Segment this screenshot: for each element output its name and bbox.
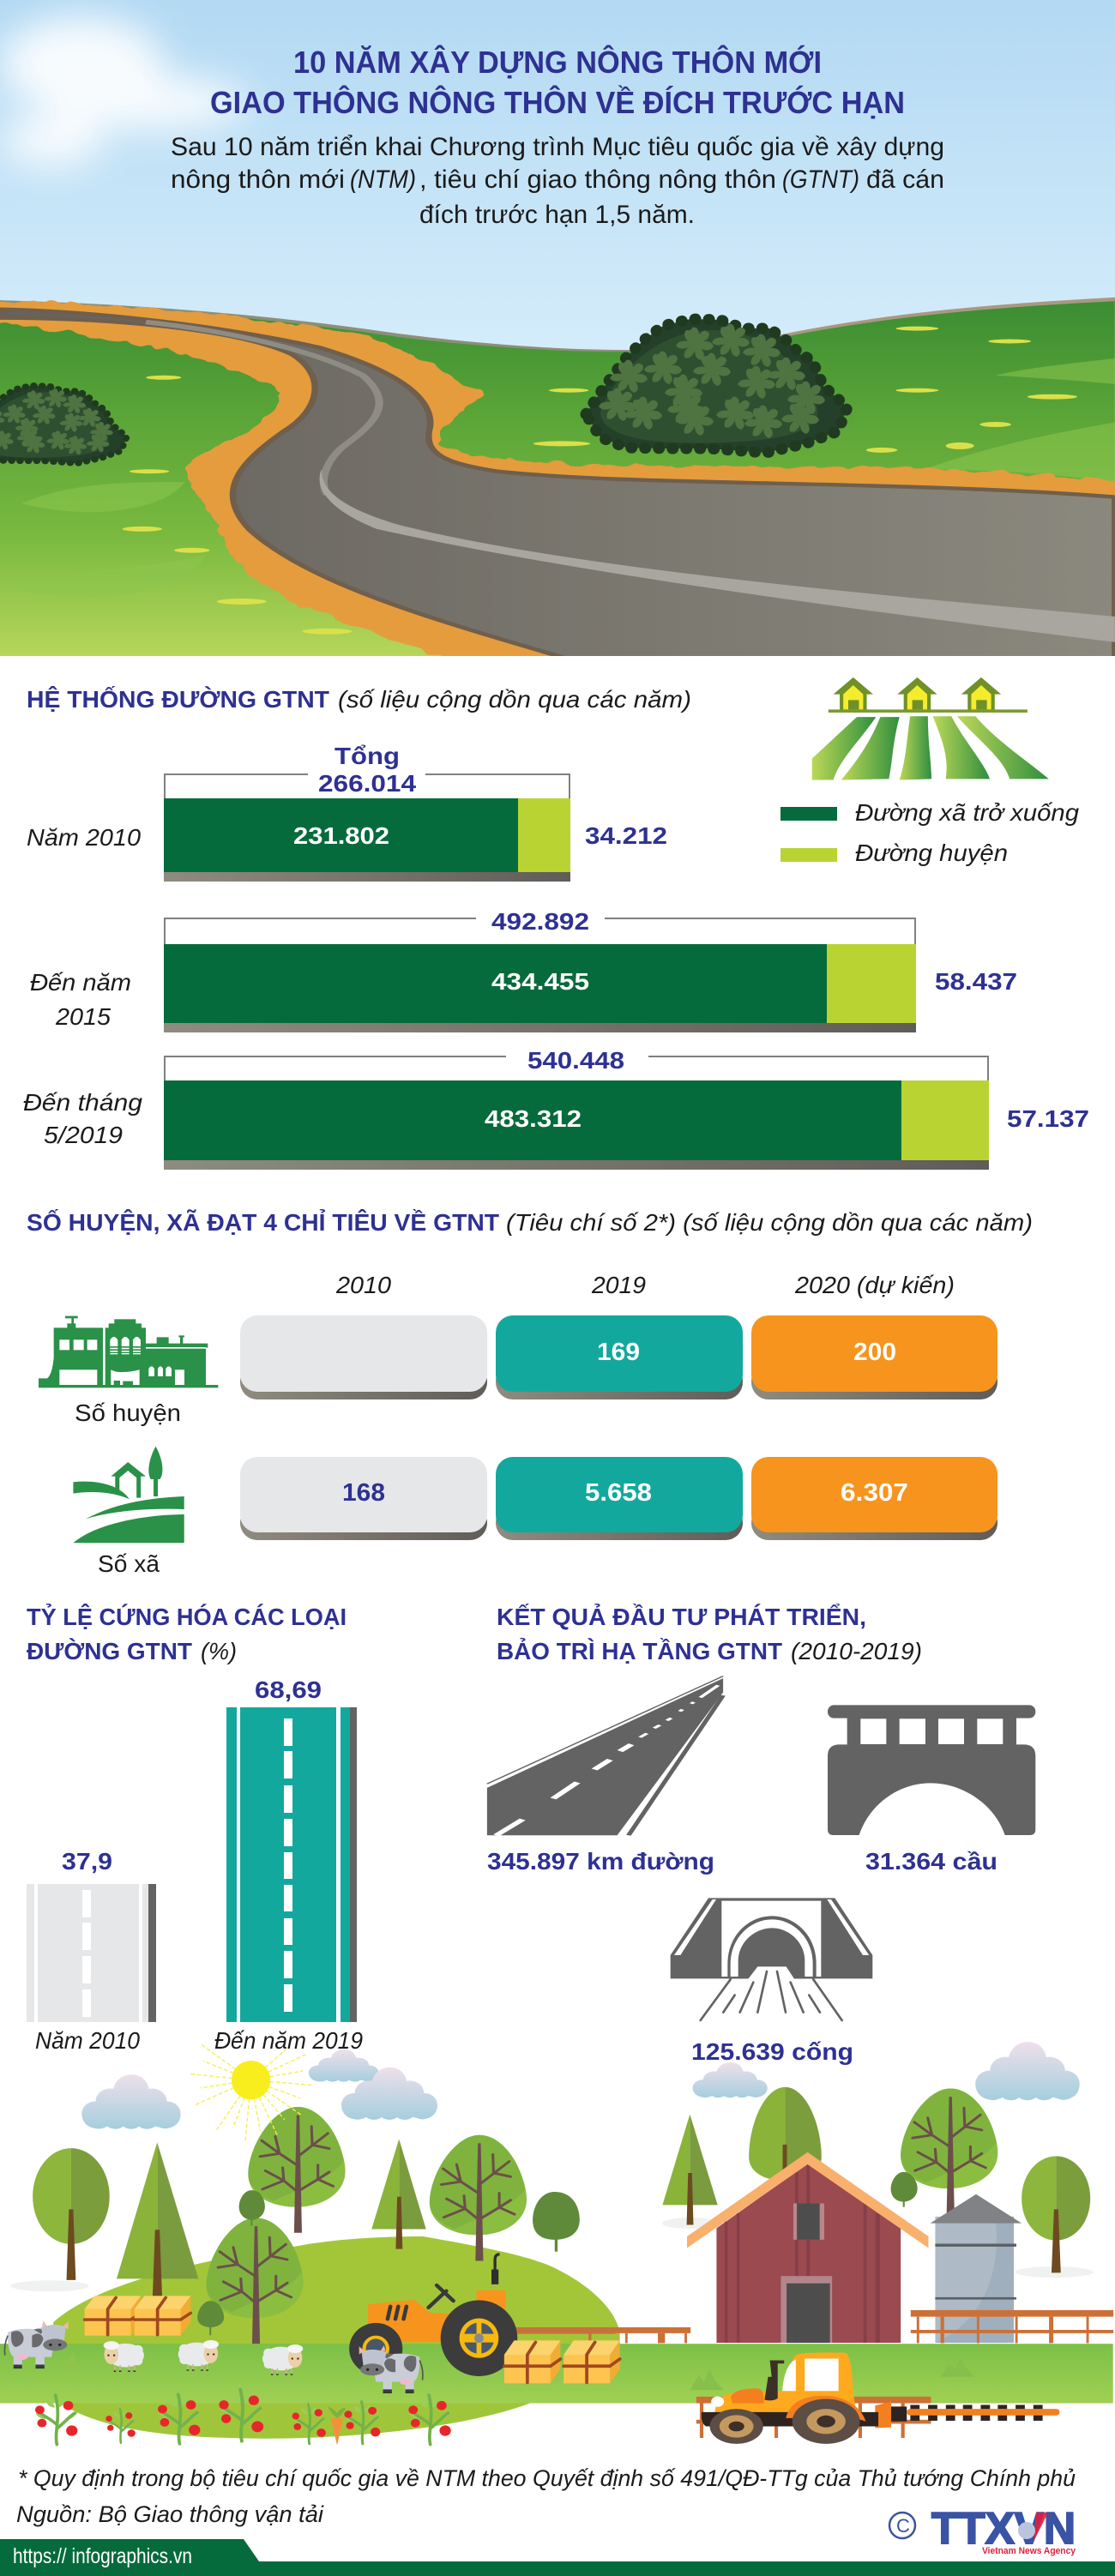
heading: districts and communes: SỐ HUYỆN, XÃ ĐẠT 4 CHỈ TIÊU VỀ GTNT [27, 1208, 499, 1236]
bush [586, 319, 847, 453]
second cow [359, 2345, 423, 2393]
bar: 5/2019: 57.137 [1007, 1105, 1089, 1132]
heading: districts and communes: (Tiêu chí số 2*) (số liệu cộng dồn qua các năm) [506, 1209, 1033, 1236]
bar: 2015: 434.455 [491, 968, 589, 995]
bar: 5/2019: Đến tháng [23, 1089, 142, 1116]
chart: paving 2010 road bar [27, 1848, 156, 2054]
footnote and source: * Quy định trong bộ tiêu chí quốc gia về NTM theo Quyết định số 491/QĐ-TTg của Thủ tướng Chính phủ [18, 2465, 1076, 2491]
cards: districts row: 200 [853, 1339, 896, 1366]
cards: districts row [240, 1315, 997, 1399]
bar: 2010: 34.212 [585, 822, 667, 849]
bar: 5/2019: 483.312 [485, 1105, 582, 1132]
bar: 5/2019 [23, 1047, 1089, 1170]
footnote and source: Nguồn: Bộ Giao thông vận tải [16, 2501, 324, 2527]
legend: Đường xã trở xuống [855, 799, 1079, 826]
bar: 2015: 492.892 [491, 908, 589, 935]
heading: paving rate: ĐƯỜNG GTNT [27, 1638, 192, 1664]
label: road km: 345.897 km đường [487, 1848, 714, 1875]
legend [780, 799, 1079, 866]
label: bridges: 31.364 cầu [865, 1848, 997, 1875]
chart: paving 2019 road bar [214, 1676, 363, 2054]
intro text: đích trước hạn 1,5 năm. [419, 201, 695, 229]
chart: paving 2010 road bar: 37,9 [62, 1848, 112, 1875]
bar: 2010: 231.802 [293, 822, 389, 849]
lower field [60, 2404, 530, 2439]
intro text: nông thôn mới [171, 166, 345, 194]
heading: road system: HỆ THỐNG ĐƯỜNG GTNT [27, 685, 329, 713]
grass tufts [57, 2352, 974, 2390]
heading: paving rate: TỶ LỆ CỨNG HÓA CÁC LOẠI [27, 1603, 347, 1630]
clouds in the sky [0, 17, 249, 166]
heading: paving rate [27, 1603, 347, 1664]
logo: TTXVN: C [896, 2515, 910, 2537]
intro text [171, 133, 944, 229]
yellow tractor [702, 2352, 1060, 2444]
bar: 2010: Tổng [334, 743, 400, 769]
icon: district buildings [39, 1316, 218, 1387]
intro text: (GTNT) [782, 166, 859, 194]
panel: farm scene [0, 2042, 1113, 2445]
hay bales [85, 2296, 190, 2336]
intro text: (NTM) [350, 166, 416, 194]
chart: paving 2010 road bar: Năm 2010 [35, 2027, 140, 2054]
grass band [0, 2344, 1113, 2404]
icon: culvert [671, 1898, 872, 2020]
cows [4, 2320, 69, 2368]
bar: 2010 [27, 743, 667, 882]
label: số huyện: Số huyện [75, 1399, 181, 1426]
title: GIAO THÔNG NÔNG THÔN VỀ ĐÍCH TRƯỚC HẠN [210, 84, 905, 120]
bar: 2015: Đến năm [30, 969, 131, 996]
right side pine, dome and oval trees [662, 2087, 1094, 2278]
legend: Đường huyện [855, 840, 1008, 866]
bar: 2010: 266.014 [318, 770, 416, 797]
icon: road [487, 1676, 723, 1835]
year labels: 2019 [591, 1272, 646, 1298]
bar: 2010: Năm 2010 [27, 824, 141, 851]
heading: investment results [497, 1603, 922, 1664]
bale by the tractor [504, 2340, 560, 2383]
bar: 5/2019: 5/2019 [44, 1122, 123, 1148]
small trees [197, 2172, 918, 2335]
clouds [81, 2042, 1080, 2129]
year labels: 2020 (dự kiến) [794, 1272, 955, 1298]
pine tree small [371, 2139, 426, 2249]
barn [687, 2152, 929, 2343]
lower fence [696, 2397, 931, 2438]
orange tractor [349, 2253, 615, 2376]
chart: paving 2019 road bar: Đến năm 2019 [214, 2027, 363, 2054]
footer bar [0, 2539, 1115, 2576]
chart: paving 2019 road bar: 68,69 [255, 1676, 322, 1703]
cards: communes row: 5.658 [585, 1479, 652, 1507]
cards: districts row: 169 [597, 1339, 640, 1366]
landscape with winding road [0, 298, 1115, 665]
hill [53, 2236, 620, 2345]
heading: road system: (số liệu cộng dồn qua các năm) [338, 686, 691, 713]
bar: 5/2019: 540.448 [527, 1047, 624, 1074]
sheep [104, 2340, 303, 2374]
intro text: , tiêu chí giao thông nông thôn [419, 166, 776, 194]
panel: hero illustration [0, 0, 1115, 665]
cards: communes row: 168 [342, 1479, 385, 1507]
bar: 2015: 2015 [55, 1003, 111, 1030]
tomato plants and carrot [35, 2384, 452, 2445]
label: culverts: 125.639 cống [691, 2038, 853, 2065]
sky [0, 0, 1115, 422]
title: 10 NĂM XÂY DỰNG NÔNG THÔN MỚI [293, 44, 822, 80]
heading: road system [27, 685, 691, 713]
cards: communes row: 6.307 [841, 1479, 908, 1507]
sun [189, 2043, 313, 2141]
heading: investment results: (2010-2019) [791, 1638, 922, 1664]
title [210, 44, 905, 120]
heading: districts and communes [27, 1208, 1033, 1236]
pine tree [117, 2142, 198, 2297]
oval tree [10, 2148, 110, 2291]
intro text: đã cán [866, 166, 944, 194]
heading: investment results: BẢO TRÌ HẠ TẦNG GTNT [497, 1637, 782, 1664]
bar: 2015: 58.437 [935, 968, 1017, 995]
branch trees [206, 2088, 997, 2344]
heading: paving rate: (%) [201, 1638, 237, 1664]
year labels: 2010 [335, 1272, 391, 1298]
icon: farm houses and fields [812, 677, 1049, 780]
icon: commune [73, 1447, 184, 1543]
heading: investment results: KẾT QUẢ ĐẦU TƯ PHÁT TRIỂN, [497, 1603, 866, 1630]
footer bar: https:// infographics.vn [13, 2544, 192, 2568]
logo: TTXVN: TTXVN [931, 2504, 1076, 2554]
footnote and source [16, 2465, 1076, 2527]
icon: bridge [828, 1705, 1035, 1835]
small bush [0, 386, 127, 463]
silo [931, 2194, 1022, 2343]
logo: TTXVN: Vietnam News Agency [982, 2546, 1076, 2556]
intro text: Sau 10 năm triển khai Chương trình Mục tiêu quốc gia về xây dựng [171, 133, 944, 161]
cards: communes row [240, 1457, 997, 1540]
year labels [335, 1272, 955, 1298]
bar: 2015 [30, 908, 1017, 1032]
label: số xã: Số xã [98, 1550, 160, 1577]
fences [533, 2310, 1113, 2343]
